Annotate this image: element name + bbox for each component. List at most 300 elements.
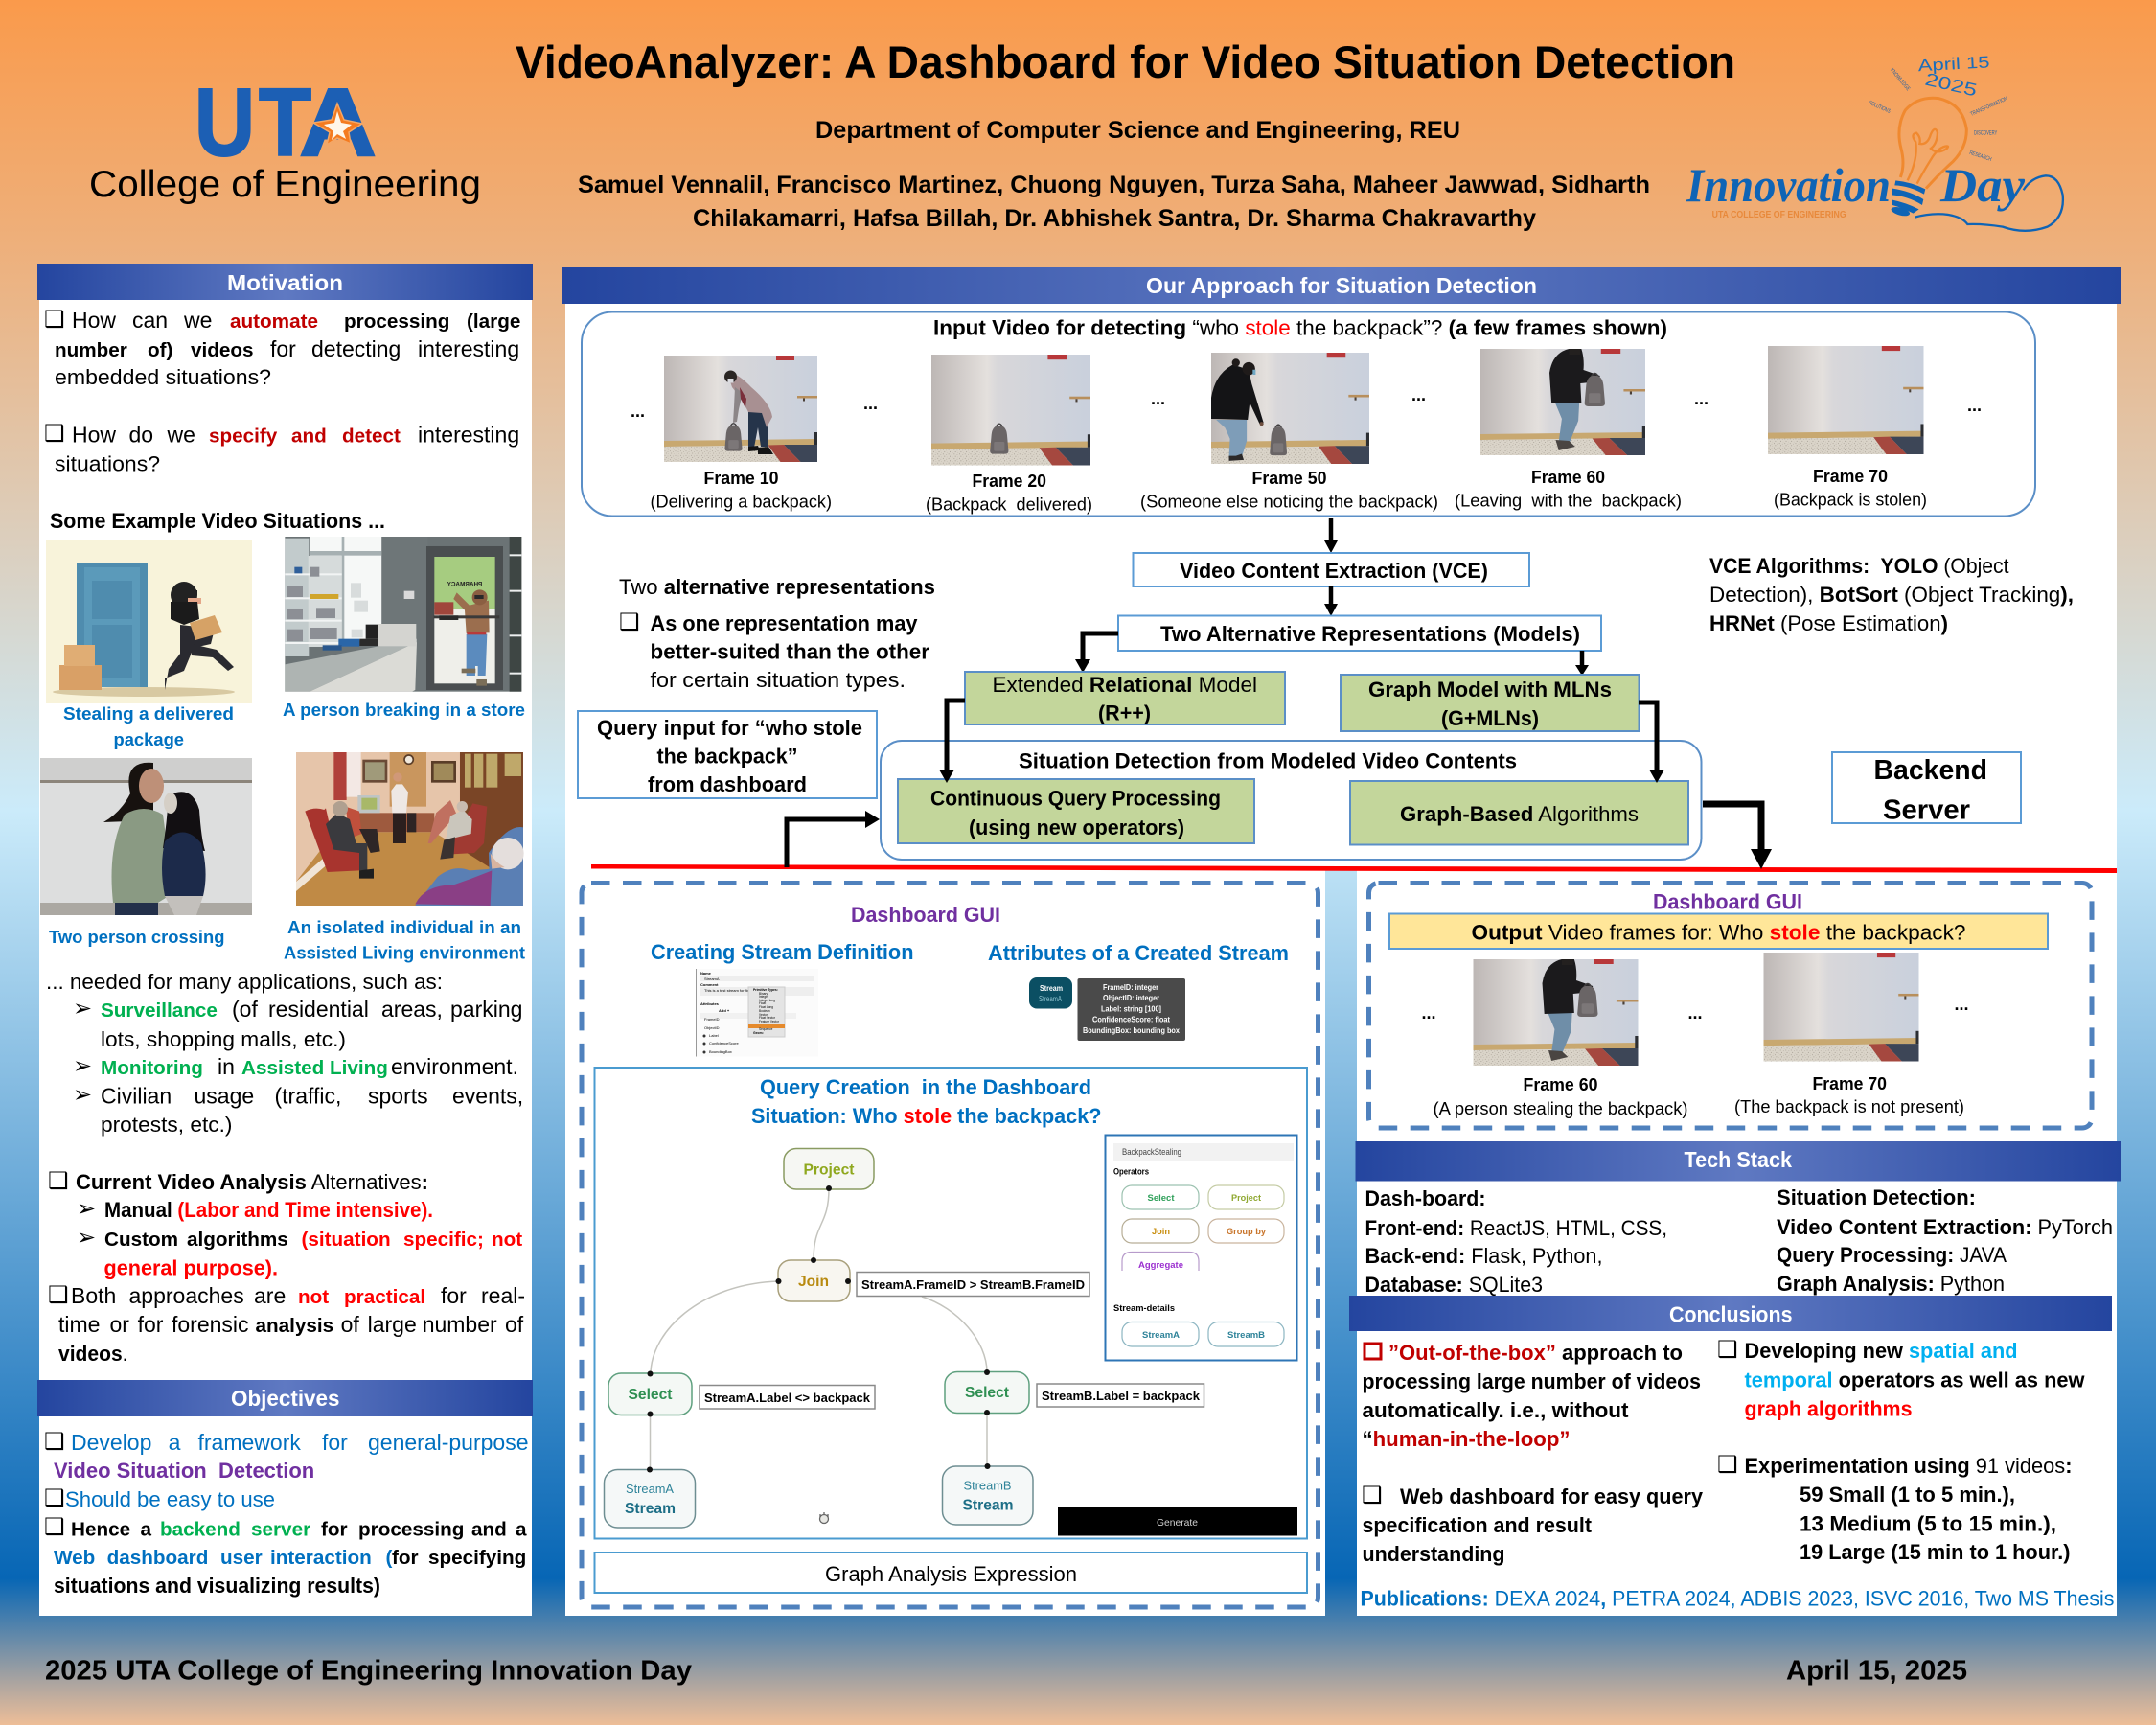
text: current video analysis alternatives: number (423, 1312, 497, 1337)
text: motivation questions: (large (467, 310, 520, 333)
operator buttons (1122, 1185, 1284, 1271)
panel: situation detection (881, 741, 1702, 860)
screenshot: stream definition form: This is a test stream for finding (704, 988, 756, 993)
text: VCE algorithms: HRNet (Pose Estimation) (1709, 611, 1948, 635)
screenshot: stream definition form: StreamA (704, 977, 720, 981)
text: objectives list: situations and visualizing results) (54, 1574, 380, 1598)
text: objectives list: ❑ (44, 1484, 65, 1511)
node: Select (left): Select (629, 1387, 673, 1403)
node: Select (left) (608, 1373, 692, 1414)
text: objectives list: for (392, 1547, 419, 1569)
ellipses between frames: ... (1151, 388, 1165, 408)
text: objectives list: user (220, 1547, 263, 1569)
arrow: representations to graph model (1575, 651, 1589, 676)
node: Join: Join (798, 1274, 829, 1290)
ellipses between frames: ... (1967, 395, 1982, 415)
box: query input from dashboard (578, 711, 877, 798)
text: conclusions left column: ”Out-of-the-box” approach to (1388, 1341, 1683, 1365)
text: current video analysis alternatives: (situation (301, 1229, 391, 1251)
operator buttons: Project (1231, 1193, 1262, 1204)
footer: event name: 2025 UTA College of Engineering Innovation Day (45, 1656, 692, 1687)
text: applications list: areas, (381, 997, 443, 1022)
text: two alternative representations note: As one representation may (650, 611, 918, 635)
text: objectives list: backend (160, 1518, 241, 1541)
heading: Tech Stack: Tech Stack (1685, 1147, 1792, 1172)
text: two alternative representations note (619, 575, 935, 692)
text: objectives list: a (140, 1518, 151, 1541)
text: applications list: (traffic, (274, 1083, 341, 1108)
heading: Our Approach for Situation Detection (562, 267, 2121, 304)
box: Backend Server label: Server (1883, 795, 1970, 826)
text: motivation questions: ❑ (44, 306, 65, 333)
box: continuous query processing: Continuous Query Processing (930, 786, 1221, 811)
text: motivation questions (44, 306, 520, 475)
text: applications list: residential (268, 997, 369, 1022)
node: StreamA (604, 1470, 696, 1528)
heading: Motivation (37, 264, 533, 300)
logo: UTA College of Engineering: T (259, 69, 311, 176)
text: current video analysis alternatives: are (254, 1283, 286, 1308)
frame 50: Frame 50 (1251, 468, 1326, 488)
box: graph analysis expression: Graph Analysis Expression (825, 1562, 1077, 1586)
text: applications list: Surveillance (101, 1000, 218, 1022)
text: motivation questions: and (291, 426, 327, 447)
heading: example video situations: Some Example Video Situations ... (50, 509, 385, 533)
logo: Innovation Day: SOLUTIONS (1868, 101, 1892, 115)
text: current video analysis alternatives: general purpose). (103, 1255, 278, 1280)
divider: red line between backend and dashboard (591, 864, 2117, 873)
screenshot: stream definition form: Attributes (700, 1001, 720, 1006)
panel: input video frames (582, 312, 2035, 516)
caption: person breaking in: A person breaking in a store (283, 700, 525, 720)
screenshot: stream definition form: ConfidenceScore (709, 1041, 739, 1046)
text: conclusions left column: ❑ (1362, 1482, 1383, 1508)
node: Project (784, 1148, 874, 1189)
text: applications list: ... needed for many applications, such as: (46, 970, 443, 994)
text: applications list: usage (194, 1083, 254, 1108)
authors: Samuel Vennalil, Francisco Martinez, Chuong Nguyen, Turza Saha, Maheer Jawwad, Sidharth (578, 172, 1650, 198)
text: conclusions right column: Developing new spatial and (1744, 1339, 2018, 1363)
text: situation detection stack (1777, 1185, 2113, 1296)
ellipses between output frames: ... (1955, 994, 1968, 1014)
text: VCE algorithms: VCE Algorithms: YOLO (Object (1709, 554, 2008, 578)
panel: left dashboard GUI (582, 884, 1319, 1607)
output frame 60: (A person stealing the backpack) (1434, 1098, 1688, 1118)
operator buttons: Group by (1227, 1227, 1267, 1237)
text: objectives list: a (169, 1430, 181, 1455)
screenshot: stream definition form: Primitive Types: (753, 988, 778, 992)
screenshot: stream definition form: Add + (719, 1008, 730, 1013)
heading: attributes of a created stream: Attributes of a Created Stream (988, 941, 1289, 965)
text: current video analysis alternatives: specific; (403, 1229, 484, 1251)
caption: stealing a delivered package: Stealing a delivered (63, 703, 234, 724)
text: objectives list: specifying (428, 1547, 526, 1569)
screenshot: stream definition form: Integer (759, 995, 769, 999)
heading: Objectives (37, 1380, 533, 1416)
screenshot: stream definition form: Geom: (753, 1031, 764, 1035)
text: motivation questions: automate (230, 310, 318, 333)
text: current video analysis alternatives: ❑ (48, 1167, 69, 1194)
captions: two person crossing and isolated individual: An isolated individual in an (287, 917, 521, 937)
arrow: input video to VCE (1324, 518, 1338, 553)
text: conclusions left column: “human-in-the-loop” (1363, 1427, 1570, 1451)
text: motivation questions: situations? (55, 452, 160, 475)
authors (578, 172, 1650, 232)
text: conclusions right column (1717, 1336, 2085, 1564)
image: stealing a delivered package (46, 540, 252, 703)
box: query input from dashboard: Query input for “who stole (597, 716, 862, 740)
panel: right dashboard GUI output (1368, 884, 2092, 1128)
text: applications list: sports (368, 1083, 428, 1108)
frame 20 (926, 355, 1092, 514)
text: conclusions right column: Experimentation using 91 videos: (1744, 1454, 2072, 1478)
box: Graph Model with MLNs (1341, 675, 1639, 731)
text: conclusions left column (1362, 1341, 1704, 1566)
text: motivation questions: processing (344, 310, 449, 333)
query graph edges (650, 1188, 987, 1470)
screenshot: stream node with attributes tooltip: Stream (1040, 984, 1063, 993)
node: StreamB: Stream (962, 1497, 1014, 1514)
panel: query creation (594, 1068, 1307, 1539)
text: two alternative representations note: Two alternative representations (619, 575, 935, 599)
title: VideoAnalyzer: A Dashboard for Video Situation Detection (516, 36, 1735, 87)
text: current video analysis alternatives: Current Video Analysis Alternatives: (76, 1170, 428, 1194)
text: current video analysis alternatives: ❑ (48, 1281, 69, 1308)
screenshot: stream node with attributes tooltip: StreamA (1039, 995, 1063, 1003)
text: current video analysis alternatives: ➢ (77, 1195, 96, 1222)
node: StreamA: Stream (625, 1501, 676, 1517)
text: current video analysis alternatives: practical (344, 1286, 425, 1308)
text: applications list: ➢ (73, 1052, 92, 1079)
box: Extended Relational Model: Extended Relational Model (993, 673, 1257, 697)
logo: UTA College of Engineering: A (299, 69, 377, 176)
frame 70 (1768, 346, 1927, 510)
text: current video analysis alternatives: large (368, 1312, 417, 1337)
output frame 70: Frame 70 (1813, 1073, 1887, 1093)
text: motivation questions: specify (209, 426, 278, 447)
text: current video analysis alternatives: not (298, 1286, 329, 1308)
bar: output video frames (1389, 914, 2048, 949)
text: current video analysis alternatives: for (138, 1312, 164, 1337)
box: query input from dashboard: from dashboard (648, 772, 807, 796)
box: continuous query processing: (using new operators) (969, 816, 1184, 840)
node: StreamA: StreamA (626, 1482, 674, 1496)
captions: two person crossing and isolated individual (49, 917, 525, 962)
text: objectives list: Hence (71, 1518, 130, 1541)
heading: Motivation: Motivation (227, 270, 343, 295)
text: motivation questions: can (132, 308, 168, 333)
box: Backend Server label: Backend (1874, 755, 1987, 786)
condition: join: StreamA.FrameID > StreamB.FrameID (861, 1277, 1085, 1292)
text: applications list: ➢ (73, 995, 92, 1022)
logo: Innovation Day: RESEARCH (1968, 150, 1992, 163)
text: two alternative representations note: for certain situation types. (650, 668, 906, 692)
text: motivation questions: detecting (311, 336, 401, 361)
heading: Dashboard GUI: Dashboard GUI (1653, 889, 1802, 914)
text: conclusions left column: automatically. i.e., without (1363, 1398, 1629, 1422)
text: dashboard stack (1365, 1186, 1667, 1297)
logo: UTA College of Engineering (89, 69, 481, 205)
text: conclusions left column: understanding (1363, 1542, 1504, 1566)
heading: query creation (751, 1075, 1102, 1128)
screenshot: stream definition form: Sequence (759, 1027, 773, 1031)
logo: Innovation Day: KNOWLEDGE (1889, 68, 1911, 92)
text: applications list: (of (232, 997, 258, 1022)
heading: query creation: Query Creation in the Dashboard (760, 1075, 1091, 1099)
screenshot: stream definition form: Comment (700, 982, 719, 987)
text: motivation questions: we (183, 308, 212, 333)
logo: Innovation Day: Innovation (1686, 158, 1891, 212)
logo: Innovation Day: DISCOVERY (1974, 131, 1997, 137)
box: Backend Server label (1832, 752, 2021, 826)
logo: Innovation Day: TRANSFORMATION (1970, 96, 2008, 118)
text: applications list: environment. (391, 1054, 518, 1079)
frame 20: Frame 20 (972, 471, 1046, 491)
box: continuous query processing (898, 779, 1254, 843)
screenshot: stream definition form: Integer long (759, 999, 775, 1002)
text: objectives list: Should be easy to use (65, 1487, 275, 1511)
text: motivation questions: How (72, 308, 116, 333)
box: Extended Relational Model: (R++) (1098, 702, 1151, 724)
ellipses between frames: ... (863, 393, 878, 413)
heading: query creation: Situation: Who stole the backpack? (751, 1104, 1102, 1128)
text: VCE algorithms: Detection), BotSort (Object Tracking), (1709, 583, 2074, 607)
text: current video analysis alternatives: time (58, 1312, 100, 1337)
screenshot: stream definition form: Label (709, 1033, 719, 1038)
box: Two Alternative Representations (1118, 615, 1601, 651)
screenshot: stream definition form: Float (759, 1001, 766, 1005)
operator buttons: Join (1152, 1227, 1170, 1237)
screenshot: stream node with attributes tooltip: FrameID: integer (1103, 983, 1158, 992)
captions: two person crossing and isolated individual: Assisted Living environment (284, 943, 525, 962)
panel: operators sidebar (1106, 1135, 1297, 1361)
bar: output video frames: Output Video frames for: Who stole the backpack? (1472, 920, 1966, 945)
stream buttons (1122, 1322, 1284, 1346)
text: applications list: in (218, 1054, 235, 1079)
text: applications list: Monitoring (101, 1057, 203, 1079)
caption: stealing a delivered package (63, 703, 234, 749)
text: objectives list: Develop (71, 1430, 151, 1455)
screenshot: stream definition form: Boolean (759, 1009, 770, 1013)
output frame 60 (1434, 959, 1688, 1118)
text: objectives list: interaction (270, 1547, 372, 1569)
text: objectives list: a (516, 1518, 527, 1541)
heading: input video: Input Video for detecting “who stole the backpack”? (a few frames shown) (933, 316, 1667, 339)
ellipses between output frames: ... (1688, 1002, 1702, 1023)
text: motivation questions: of) (148, 339, 172, 361)
department line: Department of Computer Science and Engineering, REU (815, 117, 1460, 144)
text: current video analysis alternatives: of (505, 1312, 524, 1337)
heading: Dashboard GUI: Dashboard GUI (851, 903, 1000, 927)
text: conclusions right column: graph algorithms (1744, 1397, 1913, 1420)
screenshot: stream definition form: Binary (759, 992, 768, 996)
text: conclusions left column: Web dashboard for easy query (1400, 1484, 1704, 1508)
text: applications list: lots, shopping malls, etc.) (101, 1027, 346, 1051)
arrow: dashboard query to backend (787, 811, 880, 867)
node: Project: Project (803, 1162, 855, 1179)
button: Generate (1058, 1506, 1297, 1535)
box: Video Content Extraction: Video Content Extraction (VCE) (1180, 559, 1488, 583)
text: situation detection stack: Situation Detection: (1777, 1185, 1976, 1209)
heading: Tech Stack (1355, 1141, 2121, 1181)
screenshot: stream definition form: Feature Vector (759, 1020, 780, 1024)
screenshot: stream definition form: Float Long (759, 1005, 773, 1009)
frame 10 (650, 356, 832, 512)
text: applications list: protests, etc.) (101, 1113, 232, 1137)
text: objectives list: ❑ (44, 1428, 65, 1455)
footer: date: April 15, 2025 (1786, 1656, 1967, 1687)
button: Generate: Generate (1157, 1517, 1198, 1529)
text: conclusions right column: temporal operators as well as new (1744, 1368, 2085, 1392)
screenshot: stream node with attributes tooltip: ObjectID: integer (1103, 994, 1159, 1002)
frame 60 (1455, 349, 1682, 510)
panel: operators sidebar: BackpackStealing (1122, 1147, 1181, 1158)
logo: Innovation Day: UTA COLLEGE OF ENGINEERING (1712, 210, 1846, 220)
text: motivation questions: interesting (418, 336, 519, 361)
stream buttons: StreamB (1227, 1330, 1265, 1341)
operator buttons: Select (1148, 1193, 1175, 1204)
text: applications list (46, 970, 523, 1137)
text: current video analysis alternatives: Manual (Labor and Time intensive). (104, 1198, 433, 1222)
screenshot: stream definition form: Float Vector (759, 1016, 776, 1020)
text: applications list: parking (450, 997, 522, 1022)
text: motivation questions: videos (191, 339, 254, 361)
text: situation detection stack: Graph Analysis: Python (1777, 1272, 2005, 1296)
icon: hand cursor (820, 1512, 828, 1524)
image: two person crossing (40, 758, 252, 915)
text: current video analysis alternatives: of (341, 1312, 359, 1337)
screenshot: stream definition form (696, 969, 818, 1056)
box: Graph Model with MLNs: (G+MLNs) (1441, 706, 1539, 730)
image: person breaking in a store: PHARMACY (447, 583, 482, 588)
text: conclusions right column: ❑ (1717, 1451, 1738, 1478)
ellipses between output frames: ... (1422, 1002, 1435, 1023)
frame 10: Frame 10 (703, 468, 778, 488)
logo: Innovation Day: Day (1939, 158, 2026, 212)
text: current video analysis alternatives: approaches (128, 1283, 244, 1308)
text: current video analysis alternatives: real- (481, 1283, 525, 1308)
arrow: VCE to alternative representations (1324, 586, 1338, 616)
frame 60: (Leaving with the backpack) (1455, 491, 1682, 510)
arrow: representations to relational model (1075, 633, 1118, 673)
logo: Innovation Day (1686, 52, 2063, 231)
text: motivation questions: ❑ (44, 420, 65, 447)
text: conclusions right column: 59 Small (1 to 5 min.), (1800, 1483, 2015, 1506)
text: motivation questions: embedded situations? (55, 365, 271, 389)
text: motivation questions: detect (342, 426, 401, 447)
text: objectives list: server (251, 1518, 310, 1541)
frame 70: Frame 70 (1813, 466, 1888, 486)
frame 50: (Someone else noticing the backpack) (1140, 491, 1438, 512)
text: objectives list: general-purpose (368, 1430, 529, 1455)
frame 60: Frame 60 (1531, 467, 1605, 487)
text: current video analysis alternatives: not (492, 1229, 522, 1251)
heading: creating stream definition: Creating Stream Definition (651, 940, 914, 964)
text: objectives list: and (471, 1518, 507, 1541)
text: motivation questions: interesting (418, 422, 519, 447)
logo: UTA College of Engineering: College of Engineering (89, 164, 481, 205)
condition: StreamA label: StreamA.Label <> backpack (704, 1391, 871, 1405)
text: conclusions right column: 13 Medium (5 to 15 min.), (1800, 1512, 2056, 1535)
node: StreamB (943, 1466, 1033, 1525)
logo: Innovation Day: 2025 (1923, 69, 1979, 100)
logo: UTA College of Engineering: U (195, 69, 255, 176)
text: motivation questions: How (72, 422, 116, 447)
text: motivation questions: we (167, 422, 195, 447)
text: current video analysis alternatives: Custom (104, 1229, 178, 1251)
screenshot: stream node with attributes tooltip: BoundingBox: bounding box (1083, 1026, 1180, 1035)
text: objectives list: Detection (218, 1459, 314, 1483)
node: Select (right) (945, 1372, 1029, 1413)
text: current video analysis alternatives: algorithms (187, 1229, 288, 1251)
text: objectives list: Video Situation (54, 1459, 207, 1483)
text: objectives list: processing (358, 1518, 464, 1541)
heading: Our Approach for Situation Detection: Our Approach for Situation Detection (1146, 273, 1537, 298)
text: current video analysis alternatives: forensic (172, 1312, 249, 1337)
box: graph analysis expression (594, 1552, 1307, 1593)
text: objectives list: ❑ (44, 1513, 65, 1540)
text: motivation questions: for (270, 336, 296, 361)
text: dashboard stack: Front-end: ReactJS, HTML, CSS, (1365, 1216, 1667, 1240)
text: current video analysis alternatives: or (109, 1312, 129, 1337)
ellipses between frames: ... (1411, 384, 1426, 404)
operator buttons: Aggregate (1138, 1260, 1183, 1271)
ellipses between frames (631, 384, 1982, 421)
panel: conclusions (1349, 1296, 2114, 1610)
text: objectives list: for (322, 1430, 348, 1455)
arrow: backend results to dashboard (1703, 804, 1772, 869)
screenshot: stream definition form: Vector (759, 1013, 768, 1017)
logo: Innovation Day: April 15 (1917, 52, 1990, 75)
frame 10: (Delivering a backpack) (650, 491, 832, 512)
text: motivation questions: do (128, 422, 153, 447)
text: two alternative representations note: better-suited than the other (650, 640, 929, 663)
condition: join (857, 1273, 1089, 1296)
ellipses between frames: ... (1694, 388, 1709, 408)
node: Join (778, 1260, 850, 1301)
output frame 70 (1734, 953, 1964, 1116)
condition: StreamB label: StreamB.Label = backpack (1042, 1389, 1201, 1403)
text: objectives list: for (321, 1518, 348, 1541)
ellipses between output frames (1422, 994, 1968, 1023)
authors: Chilakamarri, Hafsa Billah, Dr. Abhishek Santra, Dr. Sharma Chakravarthy (693, 205, 1536, 232)
text: applications list: ➢ (73, 1081, 92, 1108)
box: Video Content Extraction (1133, 553, 1529, 586)
heading: Objectives: Objectives (231, 1386, 339, 1411)
arrow: graph model to graph algorithms (1639, 702, 1664, 783)
node: StreamB: StreamB (964, 1478, 1012, 1493)
panel: operators sidebar: Stream-details (1113, 1303, 1175, 1314)
text: current video analysis alternatives: Both (71, 1283, 116, 1308)
text: current video analysis alternatives (48, 1167, 525, 1366)
text: two alternative representations note: ❑ (619, 609, 640, 635)
caption: stealing a delivered package: package (113, 729, 184, 749)
text: objectives list (44, 1428, 529, 1598)
node: Select (right): Select (965, 1385, 1009, 1401)
screenshot: stream definition form: Name (700, 971, 712, 976)
text: conclusions right column: 19 Large (15 min to 1 hour.) (1800, 1540, 2070, 1564)
condition: StreamB label (1037, 1384, 1204, 1407)
text: dashboard stack: Dash-board: (1365, 1186, 1485, 1210)
text: objectives list: framework (197, 1430, 301, 1455)
box: graph-based algorithms: Graph-Based Algorithms (1400, 802, 1639, 826)
frame 70: (Backpack is stolen) (1774, 489, 1927, 510)
box: query input from dashboard: the backpack” (657, 744, 797, 769)
text: applications list: Assisted Living (241, 1057, 388, 1079)
output frame 60: Frame 60 (1524, 1074, 1598, 1094)
text: conclusions left column: specification and result (1363, 1513, 1593, 1537)
image: person breaking in a store (285, 537, 521, 692)
